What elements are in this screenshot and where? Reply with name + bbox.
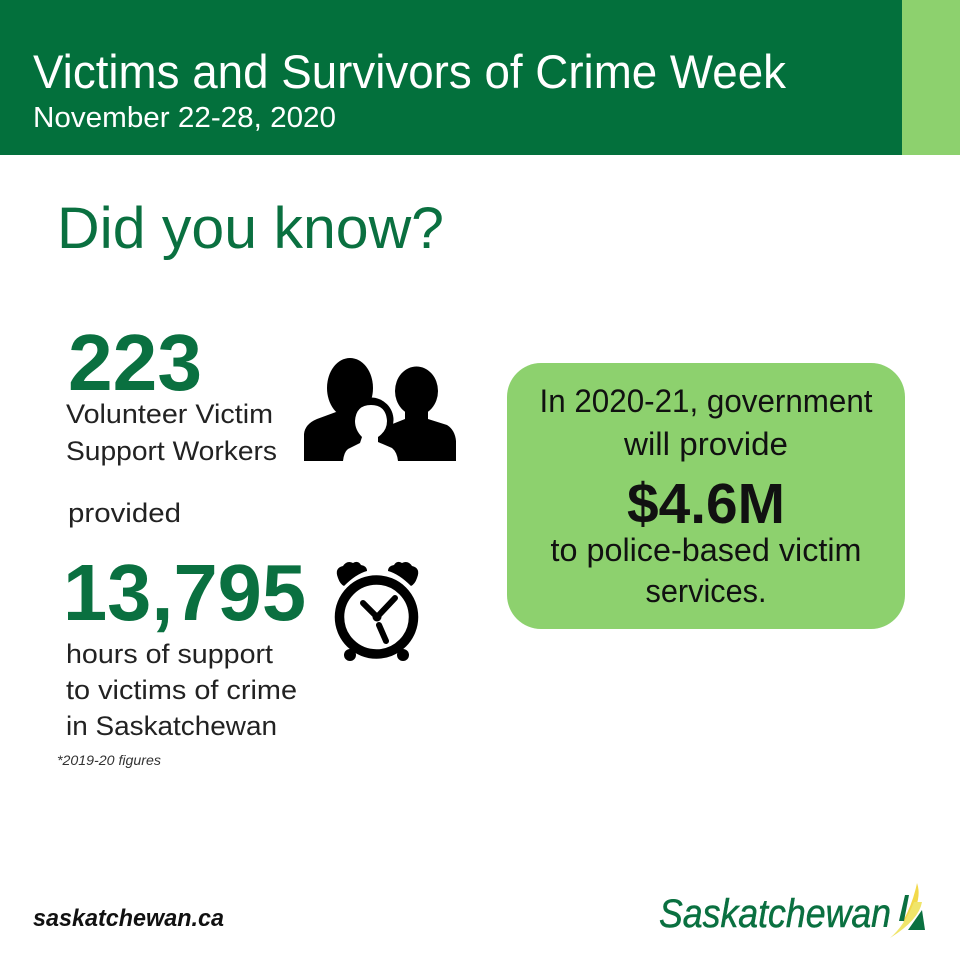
- header banner: [0, 0, 960, 155]
- callout: funding: services.: [646, 573, 766, 609]
- callout: funding: to police-based victim: [550, 532, 862, 568]
- callout: funding: In 2020-21, government: [540, 383, 873, 419]
- header date: November 22-28, 2020: [33, 102, 336, 134]
- stat: 223 volunteers: [66, 318, 277, 466]
- stat: 13,795 hours: [63, 548, 306, 741]
- header title: Victims and Survivors of Crime Week: [33, 45, 786, 98]
- text: provided: provided: [68, 498, 181, 528]
- heading: did you know: Did you know?: [57, 196, 444, 261]
- stat: 13,795 hours: to victims of crime: [66, 675, 297, 705]
- stat: 223 volunteers: Support Workers: [66, 436, 277, 466]
- stat: 13,795 hours: in Saskatchewan: [66, 711, 277, 741]
- stat: 223 volunteers: 223: [68, 318, 202, 407]
- icon: alarm clock: [337, 562, 418, 661]
- callout: funding: $4.6M: [627, 472, 785, 536]
- footer url: saskatchewan.ca: [33, 905, 224, 932]
- logo: Saskatchewan: Saskatchewan: [659, 892, 891, 936]
- icon: group of people: [304, 358, 456, 461]
- stat: 13,795 hours: 13,795: [63, 548, 306, 637]
- stat: 13,795 hours: hours of support: [66, 639, 274, 669]
- stat: 223 volunteers: Volunteer Victim: [66, 399, 273, 429]
- icon: wheat sail mark: [890, 883, 925, 938]
- callout: funding: [507, 363, 905, 629]
- footnote: *2019-20 figures: [57, 753, 161, 768]
- callout: funding: will provide: [623, 426, 788, 462]
